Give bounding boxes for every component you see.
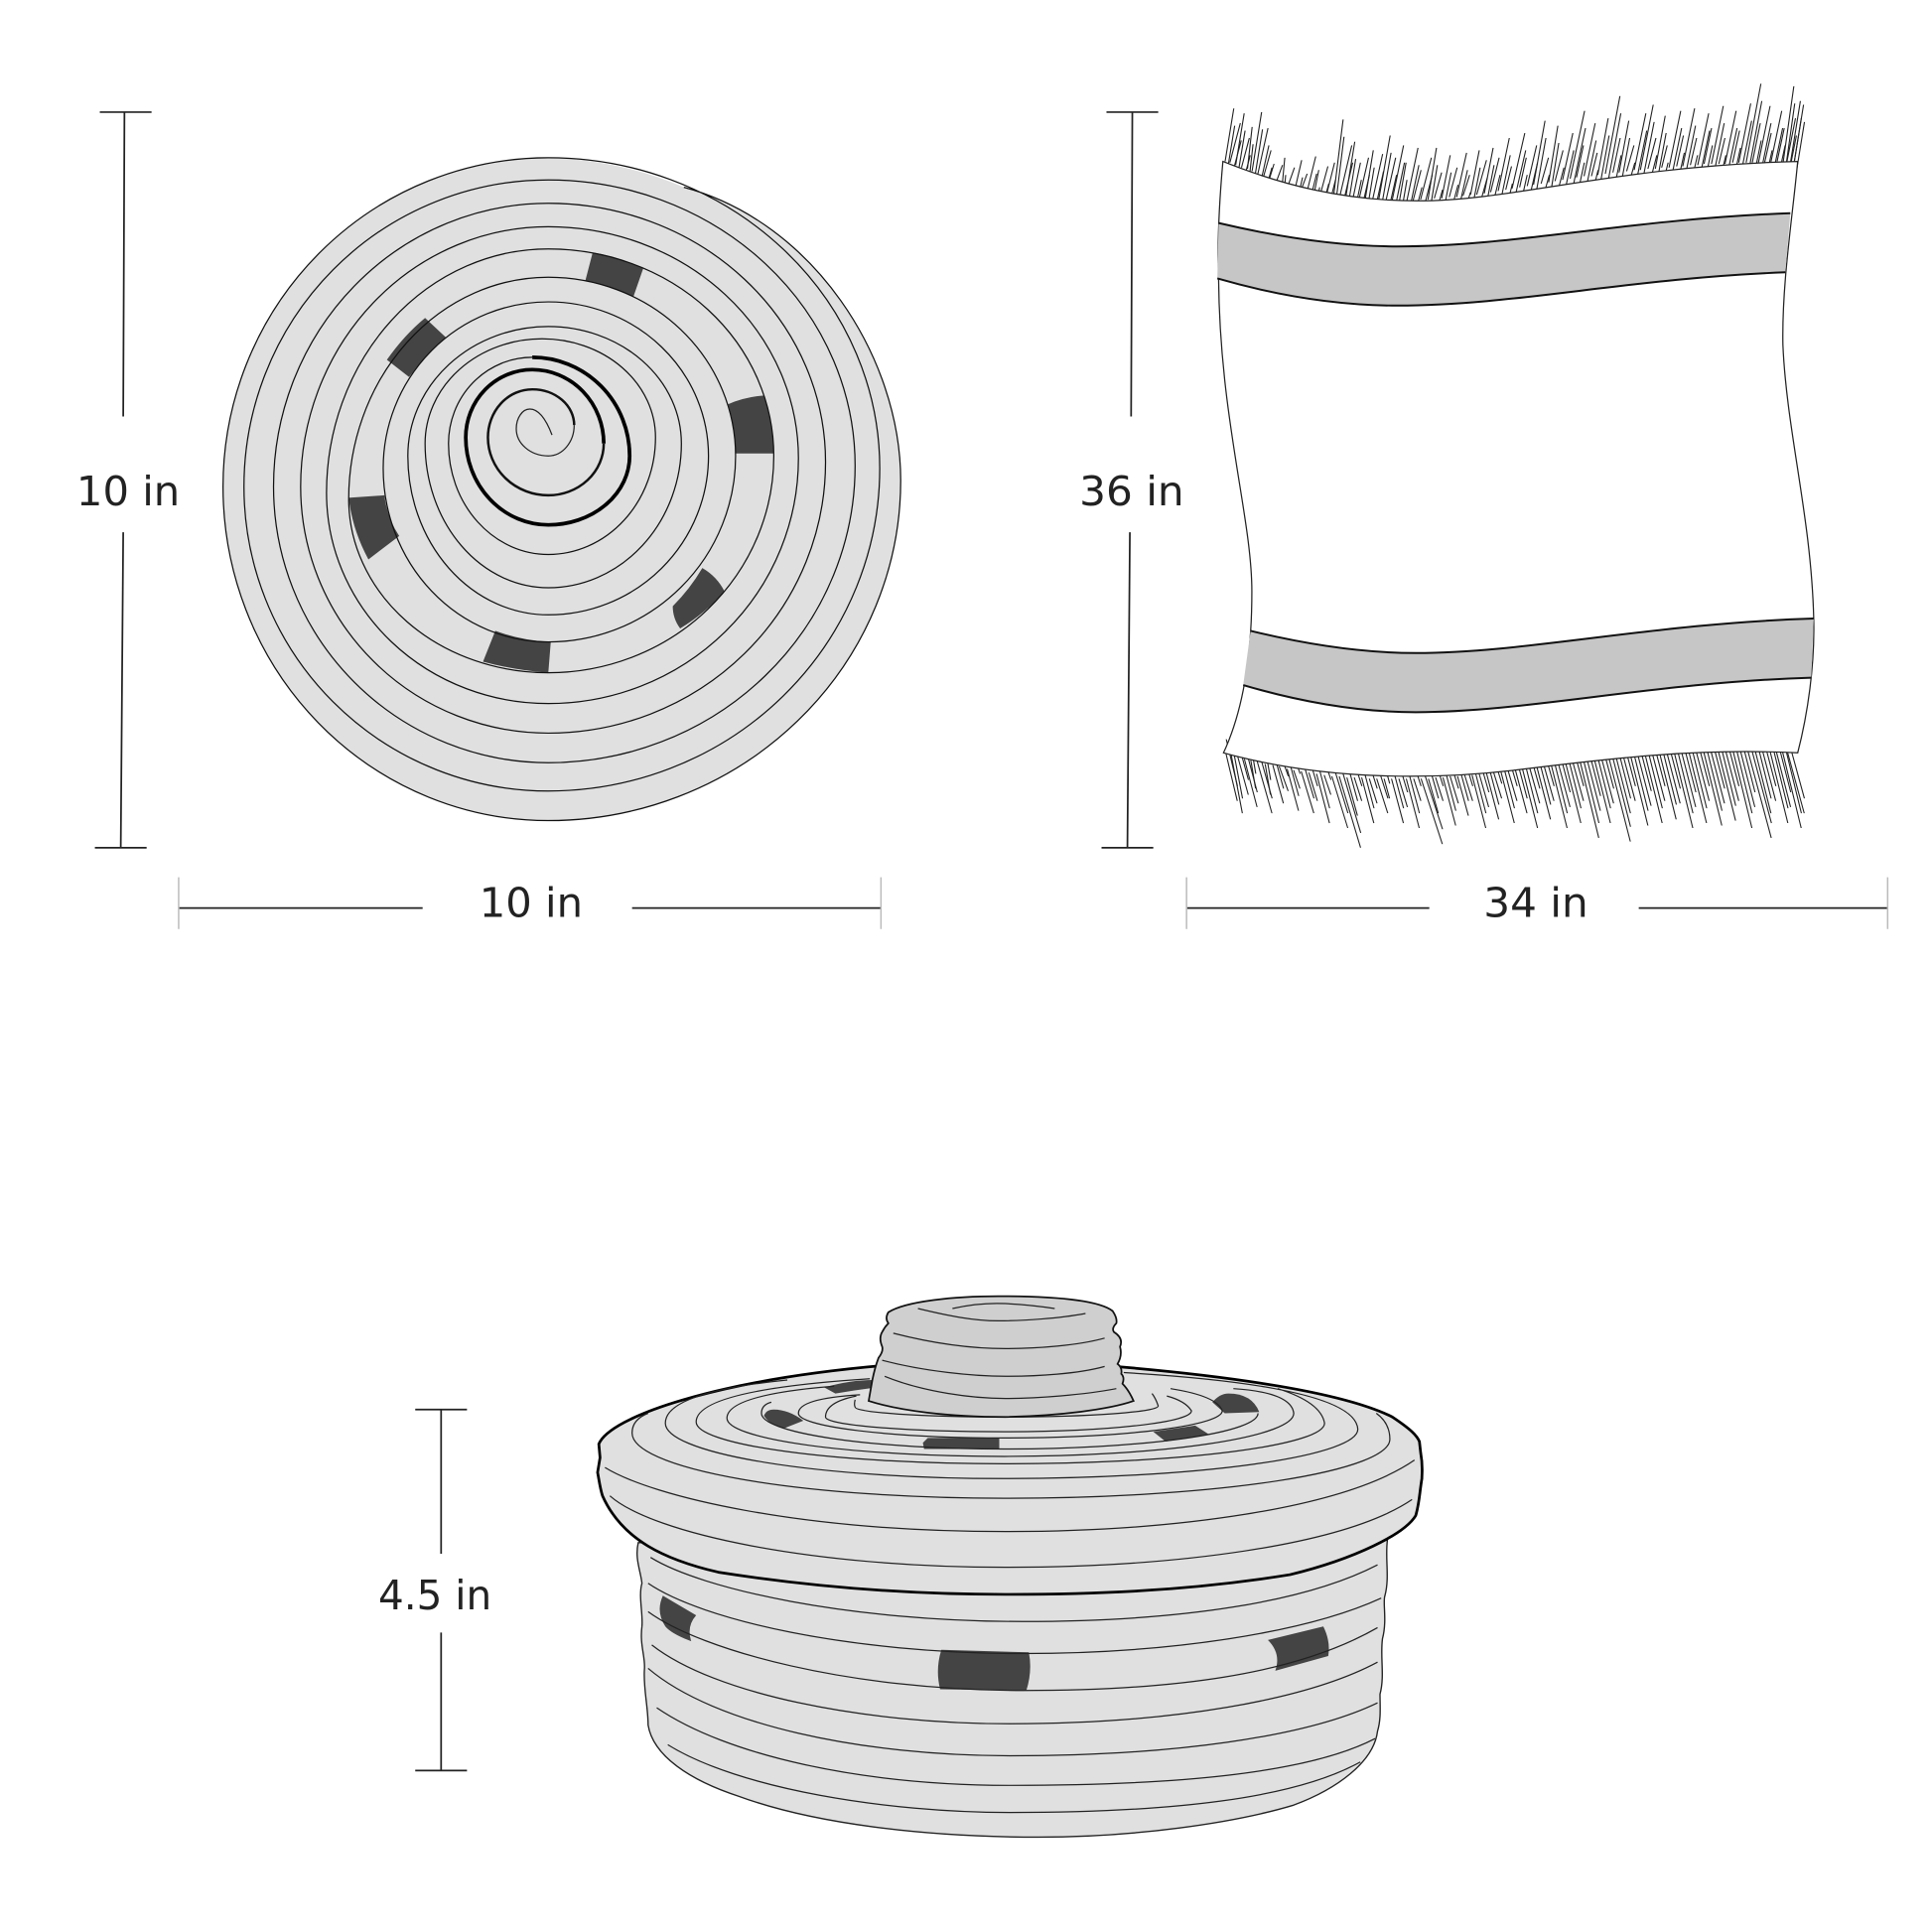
dark woven patches (348, 252, 773, 673)
dimension: lidded basket height (378, 1410, 491, 1770)
round basket top view (223, 158, 900, 821)
knob coil lines (883, 1304, 1116, 1399)
bottom grey stripe (1243, 619, 1814, 712)
knob (869, 1297, 1134, 1417)
top fringe (1217, 83, 1810, 218)
label: 34 in: 34 in (1483, 879, 1588, 926)
blanket body (1218, 162, 1814, 776)
label: 10 in height: 10 in (76, 468, 180, 515)
coil spiral centre medium (487, 389, 604, 495)
basket silhouette (223, 158, 900, 821)
body coil lines (648, 1558, 1381, 1813)
bottom fringe (1222, 736, 1815, 848)
body dark patches (660, 1595, 1328, 1691)
lidded basket side view (598, 1297, 1423, 1837)
coil spiral centre thick (466, 357, 629, 525)
lid rim lines (605, 1460, 1415, 1568)
label: 36 in: 36 in (1079, 468, 1184, 515)
dimension: round basket height (76, 112, 180, 848)
basket body (637, 1540, 1387, 1837)
lid dark patches (763, 1380, 1259, 1449)
dimension: blanket width (1186, 878, 1887, 929)
dimension: blanket length (1079, 112, 1184, 848)
lid (598, 1365, 1423, 1594)
lid concentric rings (632, 1373, 1390, 1498)
coil spiral centre thin (516, 409, 574, 456)
top grey stripe (1217, 213, 1790, 306)
dimension: round basket width (179, 878, 881, 929)
fringed blanket (1217, 83, 1815, 848)
coil spiral outer (223, 158, 900, 821)
label: 10 in width: 10 in (480, 879, 583, 926)
label: 4.5 in: 4.5 in (378, 1572, 491, 1619)
